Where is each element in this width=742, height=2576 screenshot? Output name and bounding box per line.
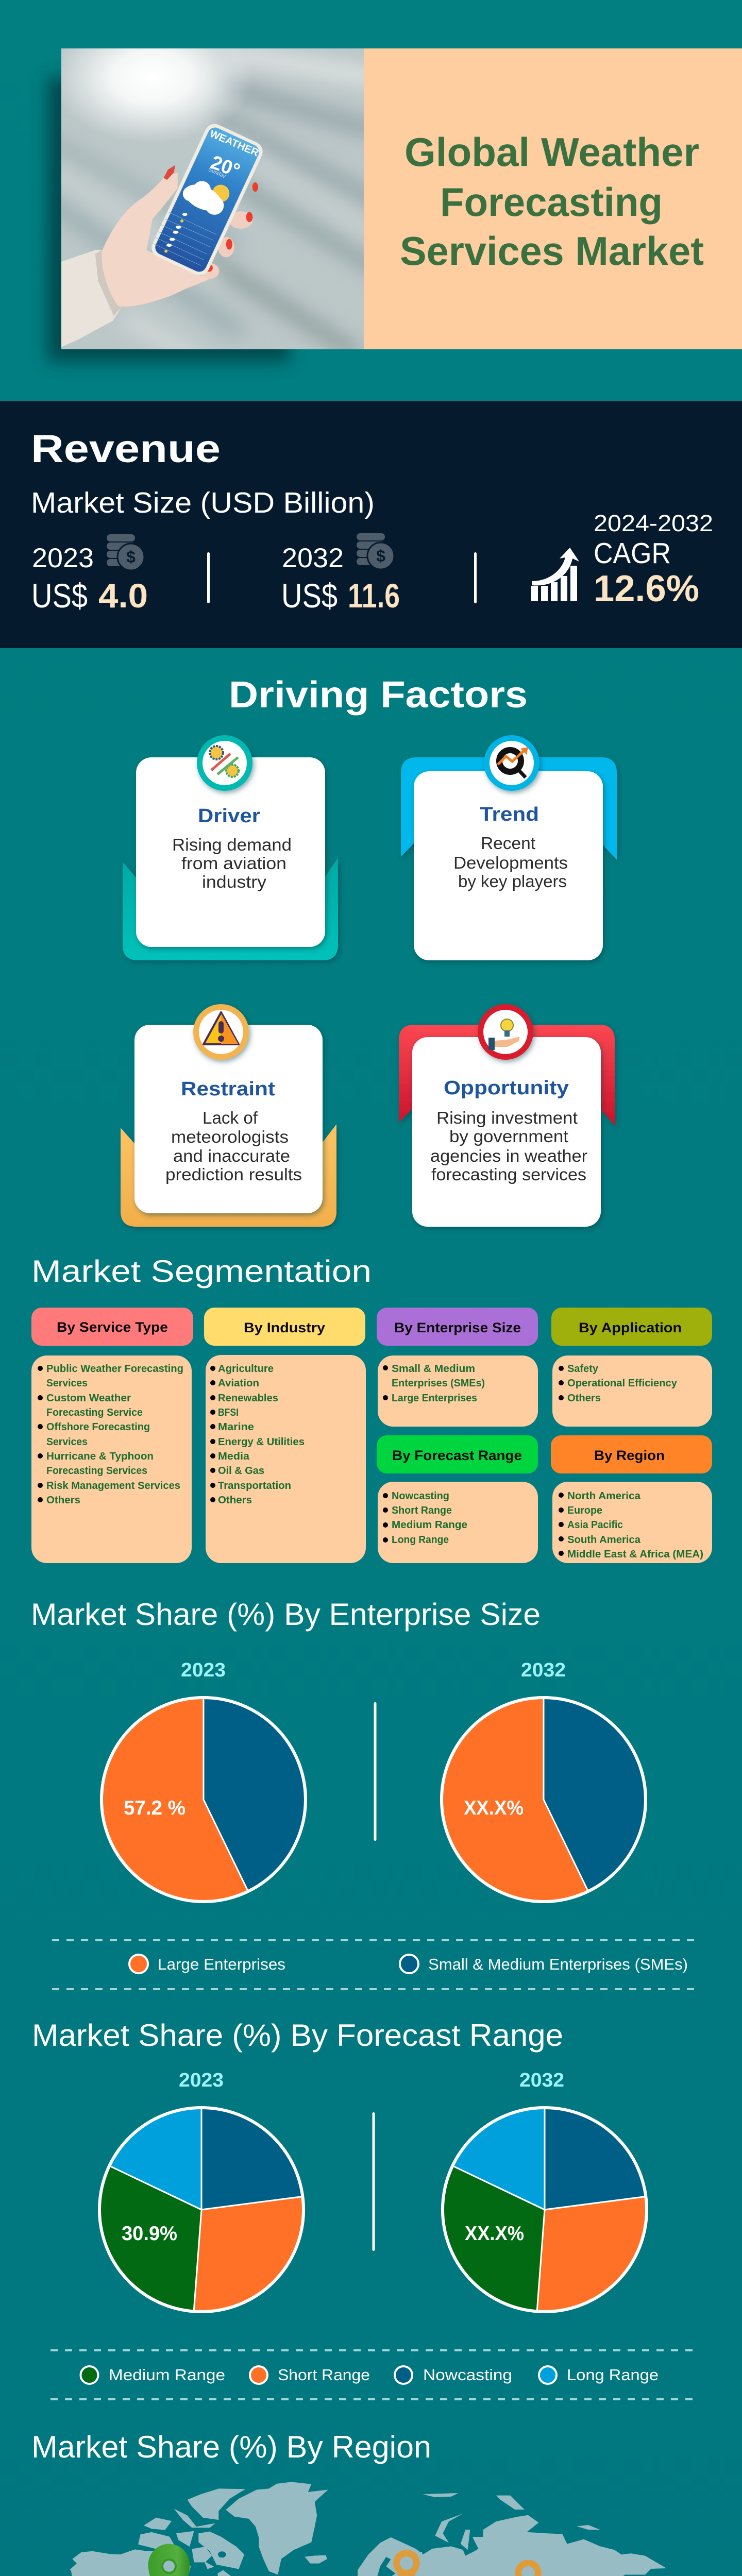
- pie chart: forecast range 2032: [443, 2108, 647, 2312]
- legend: forecast range: Long Range: [567, 2366, 659, 2384]
- list: service types: Services: [46, 1436, 88, 1448]
- heading: revenue: Revenue: [31, 427, 221, 471]
- text: restraint description: [165, 1108, 302, 1184]
- heading: share by forecast range: Market Share (%) By Forecast Range: [32, 2018, 563, 2053]
- pin: europe: [393, 2550, 420, 2576]
- text: trend description: Recent: [481, 834, 535, 853]
- heading: market segmentation: Market Segmentation: [31, 1254, 372, 1289]
- text: restraint description: meteorologists: [171, 1127, 289, 1146]
- stat: 2023: 2023: [32, 543, 94, 573]
- icon: trend: [484, 735, 539, 791]
- list: regions: Middle East & Africa (MEA): [567, 1549, 703, 1560]
- list: regions: Asia Pacific: [567, 1519, 623, 1531]
- pie chart: forecast range 2023: 30.9%: [122, 2223, 177, 2245]
- pin: north america: [148, 2544, 190, 2576]
- label: opportunity: Opportunity: [444, 1077, 569, 1099]
- phone: [148, 121, 266, 279]
- list: enterprise sizes: [383, 1363, 485, 1404]
- title: Services Market: [400, 228, 704, 274]
- pie chart: enterprise size 2023: 57.2 %: [124, 1797, 185, 1819]
- stat: 2023: [31, 543, 148, 615]
- panel: by forecast range: By Forecast Range: [392, 1448, 522, 1463]
- legend: forecast range: Nowcasting: [423, 2366, 512, 2384]
- panel: by service type: [31, 1308, 193, 1563]
- icon: coins 2032: [357, 533, 394, 569]
- list: service types: Public Weather Forecasting: [46, 1363, 183, 1375]
- list: applications: [559, 1363, 678, 1404]
- panel: by application: [551, 1308, 712, 1427]
- list: forecast ranges: [383, 1490, 467, 1546]
- list: forecast ranges: Nowcasting: [392, 1490, 449, 1502]
- text: trend description: by key players: [458, 872, 567, 891]
- panel: by application: By Application: [579, 1320, 682, 1335]
- pie chart: forecast range 2023: [99, 2108, 303, 2312]
- panel: restraint: [121, 1004, 336, 1227]
- pie chart: enterprise size 2032: [442, 1698, 646, 1902]
- nails: [164, 165, 175, 180]
- list: regions: Europe: [567, 1505, 602, 1516]
- market size label: Market Size (USD Billion): [31, 486, 375, 519]
- icon: coins 2023: $: [126, 548, 136, 566]
- list: service types: Risk Management Services: [46, 1480, 180, 1492]
- panel: by industry: By Industry: [244, 1320, 325, 1335]
- title panel: [364, 48, 742, 349]
- list: service types: Others: [46, 1495, 80, 1506]
- divider: [374, 1702, 376, 1841]
- image shadow: [47, 77, 290, 362]
- list: applications: Operational Efficiency: [567, 1378, 678, 1389]
- stat: CAGR: 12.6%: [594, 568, 699, 609]
- list: enterprise sizes: Small & Medium: [392, 1363, 475, 1375]
- list: industries: Energy & Utilities: [218, 1436, 305, 1448]
- list: industries: BFSI: [218, 1407, 239, 1418]
- list: applications: Safety: [567, 1363, 599, 1375]
- heading: share by enterprise size: Market Share (%) By Enterprise Size: [31, 1597, 541, 1632]
- list: service types: Forecasting Services: [46, 1465, 147, 1477]
- text: opportunity description: agencies in weather: [430, 1146, 587, 1165]
- label: trend: Trend: [480, 804, 539, 825]
- list: forecast ranges: Short Range: [392, 1505, 452, 1516]
- list: service types: Forecasting Service: [46, 1407, 143, 1418]
- legend: enterprise size: Large Enterprises: [158, 1955, 285, 1973]
- stat: CAGR: CAGR: [594, 537, 671, 570]
- list: industries: Media: [218, 1451, 250, 1462]
- stat: CAGR: 2024-2032: [594, 510, 713, 536]
- legend: forecast range: Short Range: [278, 2366, 370, 2384]
- panel: by enterprise size: By Enterprise Size: [394, 1320, 521, 1335]
- list: service types: Services: [46, 1378, 88, 1389]
- hand: [102, 173, 218, 307]
- title: [400, 129, 704, 274]
- pie chart: enterprise size 2032: XX.X%: [464, 1797, 524, 1819]
- list: industries: Marine: [218, 1421, 254, 1433]
- icon: coins 2023: [107, 534, 144, 570]
- icon: growth chart: [531, 548, 579, 601]
- hero photo: hand holding phone with weather app: Sunday: [207, 166, 227, 180]
- icon: coins 2032: $: [376, 547, 385, 565]
- list: enterprise sizes: Enterprises (SMEs): [392, 1378, 485, 1389]
- list: service types: [38, 1363, 183, 1506]
- label: 2032: 2032: [521, 1659, 566, 1681]
- stat: 2032: [281, 543, 400, 615]
- heading: driving factors: Driving Factors: [229, 674, 528, 716]
- list: forecast ranges: Medium Range: [392, 1519, 467, 1531]
- sleeve: [61, 250, 122, 347]
- text: trend description: Developments: [453, 853, 568, 872]
- panel: by enterprise size: [377, 1308, 538, 1427]
- list: industries: Oil & Gas: [218, 1465, 264, 1477]
- panel: by service type: By Service Type: [57, 1319, 168, 1335]
- list: forecast ranges: Long Range: [392, 1534, 449, 1546]
- list: applications: Others: [567, 1393, 601, 1404]
- legend: forecast range: [80, 2366, 659, 2384]
- hero photo: hand holding phone with weather app: WEATHER: [208, 128, 261, 159]
- stat: 2032: 11.6: [348, 577, 400, 615]
- divider: [474, 552, 477, 603]
- pie chart: forecast range 2032: XX.X%: [465, 2223, 524, 2245]
- text: opportunity description: by government: [449, 1127, 568, 1146]
- list: regions: North America: [567, 1490, 641, 1502]
- text: restraint description: Lack of: [203, 1108, 258, 1127]
- text: opportunity description: forecasting services: [431, 1165, 586, 1184]
- list: industries: Renewables: [218, 1393, 278, 1404]
- list: industries: Transportation: [218, 1480, 291, 1492]
- panel: by region: By Region: [594, 1448, 665, 1463]
- icon: driver: [197, 735, 252, 791]
- text: opportunity description: [430, 1108, 587, 1184]
- panel: driver: [123, 735, 338, 960]
- panel: by forecast range: [377, 1435, 538, 1563]
- list: industries: Aviation: [218, 1378, 259, 1389]
- text: driver description: Rising demand: [172, 835, 292, 854]
- divider: [207, 552, 210, 603]
- label: restraint: Restraint: [181, 1078, 275, 1100]
- label: 2023: 2023: [181, 1659, 226, 1681]
- panel: by region: [551, 1435, 712, 1563]
- hero photo: hand holding phone with weather app: 20°: [208, 151, 243, 181]
- stat: CAGR: [594, 510, 713, 609]
- label: 2023: 2023: [179, 2070, 224, 2091]
- list: service types: Hurricane & Typhoon: [46, 1451, 154, 1462]
- title: Global Weather: [404, 129, 699, 175]
- panel: revenue: [0, 401, 742, 648]
- text: restraint description: and inaccurate: [173, 1146, 290, 1165]
- pin: asia pacific: [515, 2560, 542, 2576]
- legend: enterprise size: [129, 1955, 688, 1973]
- list: industries: [210, 1363, 305, 1506]
- stat: 2032: US$: [281, 577, 338, 615]
- list: regions: South America: [567, 1534, 641, 1546]
- heading: share by region: Market Share (%) By Region: [31, 2430, 431, 2464]
- text: driver description: industry: [202, 872, 267, 891]
- stat: 2023: US$: [31, 577, 88, 615]
- hero photo: hand holding phone with weather app: [61, 48, 364, 349]
- text: restraint description: prediction results: [165, 1165, 302, 1184]
- legend: forecast range: Medium Range: [109, 2366, 225, 2384]
- divider: [372, 2112, 375, 2251]
- stat: 2032: 2032: [282, 543, 344, 573]
- label: 2032: 2032: [519, 2070, 564, 2091]
- pie chart: enterprise size 2023: [102, 1698, 306, 1902]
- stat: 2023: 4.0: [98, 577, 148, 615]
- text: trend description: [453, 834, 568, 891]
- list: enterprise sizes: Large Enterprises: [392, 1393, 477, 1404]
- list: industries: Agriculture: [218, 1363, 274, 1375]
- list: service types: Custom Weather: [46, 1393, 131, 1404]
- label: driver: Driver: [198, 805, 260, 827]
- panel: opportunity: [399, 1004, 615, 1227]
- panel: trend: [401, 735, 617, 960]
- legend: enterprise size: Small & Medium Enterprises (SMEs): [428, 1955, 688, 1973]
- list: industries: Others: [218, 1495, 252, 1506]
- text: opportunity description: Rising investment: [436, 1108, 578, 1127]
- world map: [70, 2482, 666, 2576]
- list: service types: Offshore Forecasting: [46, 1421, 150, 1433]
- title: Forecasting: [440, 179, 663, 225]
- icon: restraint: [193, 1004, 249, 1060]
- list: regions: [559, 1490, 703, 1560]
- text: driver description: from aviation: [181, 854, 286, 873]
- icon: opportunity: [478, 1004, 533, 1060]
- text: driver description: [172, 835, 292, 891]
- panel: by industry: [204, 1308, 366, 1563]
